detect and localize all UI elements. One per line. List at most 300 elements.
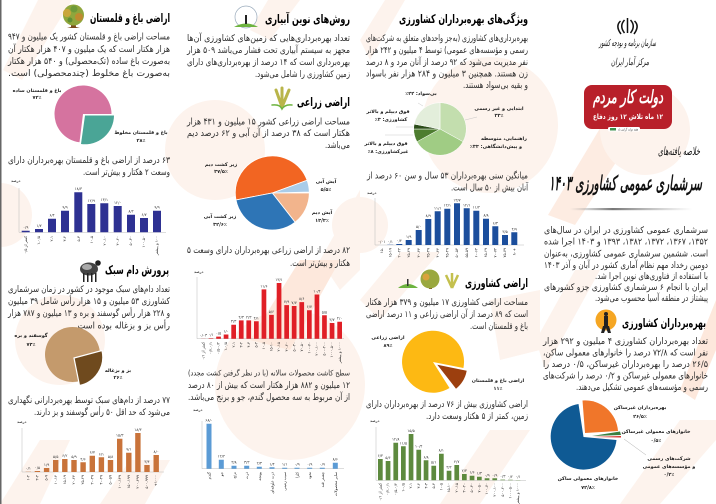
- bar chart: herd size: ۱۵-۱۹: [62, 475, 67, 485]
- pie chart: sheep and goats: ۷۴٪: [27, 342, 35, 348]
- bar chart: farmer age: ۶/۳: [493, 220, 498, 225]
- bar chart: farmer age: +۸۰: [512, 248, 516, 255]
- pie chart: farmer types: ۰/۵٪: [651, 438, 661, 444]
- bar chart: arable land size: ۱۱/۶: [260, 283, 268, 288]
- bar chart: land size: ۱۰/۴: [415, 444, 422, 449]
- pie chart: arable land: آیش دیم: [312, 209, 332, 216]
- bar chart: orchard land size: ۱۲/۹: [88, 198, 95, 203]
- pie chart: education: راهنمایی، متوسطه: [481, 136, 527, 142]
- bar chart: farmer age: ۰/۴: [397, 238, 402, 243]
- bar chart: land size: ۴/۷: [454, 459, 459, 464]
- bar chart: arable land size: ۶/۷: [307, 304, 312, 309]
- pie chart: sheep and goats: بز و بزغاله: [105, 368, 131, 374]
- pie chart: education: ابتدایی و غیر رسمی: [474, 106, 524, 112]
- text: farmer characteristics description: و بقیه بی‌سواد هستند.: [463, 81, 528, 91]
- bar chart: orchard land size: ۱۰۰-۵۰: [141, 236, 146, 248]
- bar chart: herd size: ۰/۵: [35, 465, 40, 470]
- text: irrigation description: تعداد بهره‌برداری‌هایی که زمین‌های کشاورزی آن‌ها: [187, 32, 350, 44]
- bar chart: arable land size: ۱۳/۱: [275, 277, 283, 282]
- bar chart: annual crops: ۳/۳: [244, 460, 249, 465]
- bar chart: farmer age: ۲۵-۲۹: [406, 248, 411, 258]
- bar chart: land size: ۲-۱: [408, 483, 413, 488]
- text: arable size: هکتار و بیش‌تر است.: [290, 259, 350, 269]
- bar chart: annual crops: کلزا: [294, 472, 300, 478]
- text: introduction: [544, 226, 708, 304]
- bar chart: orchard land size: ۱۰-۵: [89, 236, 94, 244]
- bar chart: orchard land size: ۱-۰/۵: [36, 236, 41, 245]
- bar chart: arable land size: ۳۰-۲۰: [284, 342, 289, 352]
- text: land size: زمین، کمتر از ۵ هکتار وسعت دارد.: [426, 412, 528, 422]
- bar chart: land size: ۱۲/۸: [392, 437, 399, 442]
- text: orchard lands description: هزار هکتار است که یک میلیون و ۴۰۷ هزار هکتار آن: [8, 43, 170, 55]
- bar chart: arable land size: ۲۰۰-۱۰۰: [314, 342, 319, 356]
- bar chart: arable land size: ۴/۳: [246, 314, 251, 319]
- bar chart: arable land size: کمتر از ۰/۱: [200, 342, 206, 360]
- pie chart: sheep and goats: [14, 327, 131, 386]
- icon: wheat: [272, 88, 292, 109]
- text: livestock description: کشاورزی ۵۳ میلیون و ۱۵ هزار رأس شامل ۳۹ میلیون: [8, 295, 171, 307]
- pie chart: education: فوق دیپلم و بالاتر: [365, 109, 410, 115]
- bar chart: annual crops: ۱/۱: [282, 462, 287, 467]
- bar chart: arable land size: درصد: [194, 270, 204, 274]
- bar chart: land size: ۰/۲-۰/۱: [385, 483, 390, 495]
- pie chart: farmer types: خانوارهای معمولی غیرساکن: [621, 429, 691, 435]
- text: arable size: ۸۲ درصد از اراضی زراعی بهره‌برداران دارای وسعت ۵: [187, 246, 350, 256]
- slogan badge: ۱۲ ماه تلاش ۱۲ روز دفاع: [593, 113, 664, 121]
- heading: farmer characteristics: ویژگی‌های بهره‌برداران کشاورزی: [399, 12, 528, 27]
- text: land size: [366, 400, 528, 422]
- pie chart: orchard types: [13, 86, 168, 144]
- bar chart: land size: ۰/۵-۰/۲: [393, 483, 398, 495]
- text: irrigation description: [186, 32, 350, 80]
- bar chart: orchard land size: ۶/۷: [141, 212, 147, 217]
- organisation name: مرکز آمار ایران: [611, 56, 649, 68]
- bar chart: land size: [370, 419, 526, 504]
- bar chart: farmer age: ۰/۰۱: [378, 239, 385, 244]
- pie chart: farmer types: ۷۲/۸٪: [581, 485, 595, 491]
- bar chart: land size: ۲/۳: [462, 468, 467, 473]
- pie chart: farmer types: [551, 400, 695, 491]
- bar chart: annual crops: ۳/۸: [231, 460, 237, 465]
- bar chart: arable land size: ۰/۵-۰/۲: [216, 342, 220, 354]
- text: farmer age: آنان بیش از ۵۰ سال است.: [451, 182, 528, 194]
- text: orchard size: وسعت ۲ هکتار و بیش‌تر است.: [83, 168, 170, 178]
- bar chart: land size: ۳۰-۲۰: [462, 483, 466, 493]
- bar chart: arable land size: [194, 270, 344, 364]
- bar chart: land size: ۱۰-۵: [438, 483, 444, 490]
- bar chart: orchard land size: ۱/۷: [36, 223, 42, 228]
- bar chart: arable land size: ۵۰-۳۰: [292, 342, 296, 352]
- bar chart: farmer age: ۴/۹: [512, 226, 517, 231]
- bar chart: farmer age: ۴۰-۴۴: [435, 248, 440, 258]
- bar chart: orchard land size: ۰/۹: [23, 224, 28, 230]
- bar chart: herd size: ۲۰-۲۴: [71, 475, 76, 485]
- bar chart: herd size: ۹/۱: [126, 447, 131, 452]
- bar chart: orchard land size: ۱۰۰ و بیشتر: [154, 236, 159, 256]
- bar chart: arable land size: ۰/۵: [216, 330, 221, 336]
- text: farmer age: میانگین سنی بهره‌برداران ۵۳ سال و سن ۶۰ درصد از: [366, 170, 528, 182]
- bar chart: annual crops: ۰/۹: [307, 462, 312, 467]
- pie chart: farmer types: و مؤسسه‌های عمومی: [643, 464, 695, 470]
- bar chart: land size: ۱۱/۵: [400, 440, 407, 445]
- pie chart: education: و پیش‌دانشگاهی: ۳۴٪: [470, 143, 522, 150]
- bar chart: land size: ۶/۳: [378, 453, 383, 458]
- bar chart: arable land size: ۴/۰: [337, 316, 342, 321]
- text: farmer characteristics description: زن هستند. همچنین ۳ میلیون و ۲۸۴ هزار نفر باسواد: [366, 70, 528, 80]
- bar chart: arable land size: ۱-۰/۵: [223, 342, 228, 351]
- slogan badge: [584, 85, 672, 132]
- text: orchard size: ۶۳ درصد از اراضی باغ و قلمستان بهره‌برداران دارای: [8, 156, 170, 166]
- bar chart: orchard land size: ۹/۹: [154, 204, 160, 210]
- text: orchard lands description: به‌صورت باغ مخلوط (چندمحصولی) است.: [8, 69, 170, 79]
- pie chart: arable land: ۴۷/۵٪: [214, 169, 228, 175]
- bar chart: land size: ۲۰۰-۱۰۰: [492, 483, 497, 497]
- pie chart: arable land: [204, 156, 337, 230]
- heading: orchard lands: اراضی باغ و قلمستان: [90, 11, 170, 26]
- text: arable description: مساحت اراضی زراعی کشور ۱۵ میلیون و ۴۳۱ هزار: [186, 118, 350, 128]
- icon: sheep: [80, 260, 101, 282]
- bar chart: herd size: ۳۰-۳۹: [90, 475, 94, 485]
- bar chart: orchard land size: درصد: [11, 179, 21, 183]
- bar chart: orchard land size: ۹/۹: [62, 204, 68, 210]
- bar chart: annual crops: یونجه: [257, 472, 262, 481]
- pie chart: farmer types: ۲۶/۵٪: [633, 414, 647, 420]
- bar chart: annual crops: جو: [219, 471, 224, 477]
- text: livestock description: [7, 285, 171, 332]
- bar chart: arable land size: ۰/۲-۰/۱: [208, 342, 213, 354]
- pie chart: farmer types: ۰/۲٪: [664, 472, 674, 478]
- pie chart: arable land: ۱۴/۴٪: [315, 218, 329, 224]
- bar chart: arable land size: ۵/۶: [269, 309, 274, 314]
- bar chart: herd size: ۰/۱: [26, 466, 31, 471]
- bar chart: farmer age: ۳۵-۳۹: [426, 248, 430, 258]
- bar chart: land size: ۰/۳: [500, 474, 505, 479]
- pie chart: sheep and goats: گوسفند و بره: [14, 332, 48, 339]
- bar chart: farmer age: ۴۵-۴۹: [444, 248, 450, 258]
- bar chart: land size: ۱۵/۵: [407, 428, 415, 433]
- text: farmer characteristics description: [365, 34, 528, 91]
- pie chart: education: فوق دیپلم و بالاتر: [363, 141, 408, 147]
- pie chart: agricultural lands: اراضی باغ و قلمستان: [472, 378, 525, 384]
- bar chart: annual crops: ۱۲/۴: [218, 454, 225, 459]
- emblem: [618, 18, 637, 34]
- bar chart: annual crops: سایر محصولات: [333, 472, 338, 496]
- text: farmer characteristics description: بهره‌برداری‌های کشاورزی (به‌جز واحدهای متعلق به شرکت‌های: [366, 34, 528, 44]
- bar chart: land size: ۵۰-۳۰: [469, 483, 474, 493]
- text: introduction: ۱۳۵۲، ۱۳۶۷، ۱۳۷۲، ۱۳۸۲، ۱۳۹۳ و ۱۴۰۳ اجرا شده: [544, 238, 708, 248]
- text: annual crops: سطح کاشت محصولات سالانه (با در نظر گرفتن کشت مجدد): [188, 368, 350, 378]
- bar chart: arable land size: ۰/۱: [208, 332, 214, 337]
- pie chart: arable land: زیر کشت آبی: [204, 213, 236, 220]
- bar chart: land size: ۰/۱: [515, 474, 521, 479]
- bar chart: farmer age: ۱۵-۱۹: [388, 248, 392, 258]
- text: irrigation description: بهره‌برداری است که ۱۴ درصد از بهره‌برداری‌های دارای: [187, 58, 350, 68]
- bar chart: land size: ۵-۴: [431, 483, 436, 488]
- bar chart: herd size: ۵/۵: [53, 454, 58, 459]
- bar chart: orchard land size: ۵-۳: [76, 236, 81, 241]
- bar chart: annual crops: ۱/۴: [269, 461, 275, 466]
- bar chart: land size: ۵/۱: [431, 460, 436, 465]
- bar chart: annual crops: ذرت علوفه‌ای: [270, 472, 274, 494]
- bar chart: annual crops: ۰/۹: [320, 462, 325, 467]
- bar chart: arable land size: ۱۰۰-۷۰: [306, 342, 312, 354]
- bar chart: orchard land size: ۶/۴: [49, 212, 55, 218]
- bar chart: herd size: ۳/۴: [144, 459, 150, 464]
- bar chart: orchard land size: ۸/۲: [128, 208, 134, 214]
- bar chart: annual crops: ۶۸/۰: [205, 418, 213, 423]
- bar chart: farmer age: ۳/۵: [502, 229, 508, 234]
- heading: modern irrigation: روش‌های نوین آبیاری: [265, 11, 350, 27]
- bar chart: orchard land size: کمتر از ۰/۵: [23, 236, 28, 254]
- bar chart: herd size: ۵-۹: [44, 475, 48, 480]
- icon: tree: [63, 4, 84, 28]
- text: farmers description: نفر است که ۷۲/۸ درصد را خانوارهای معمولی ساکن،: [543, 348, 708, 358]
- text: farmer characteristics description: نفر مدیریت می‌شود که ۹۲ درصد از آنان مرد و ۸ درصد: [366, 56, 528, 68]
- heading: agricultural lands: اراضی کشاورزی: [465, 276, 528, 291]
- text: herd size: [8, 394, 170, 418]
- pie chart: farmer types: بهره‌برداران غیرساکن: [614, 405, 667, 411]
- bar chart: farmer age: ۱/۹: [406, 234, 411, 239]
- pie chart: agricultural lands: اراضی زراعی: [371, 335, 405, 341]
- bar chart: land size: ۲۰-۱۵: [454, 483, 459, 493]
- text: livestock description: رأس بز و بزغاله بوده است.: [75, 320, 170, 332]
- text: herd size: ۷۷ درصد از دام‌های سبک توسط بهره‌بردارانی نگهداری: [8, 394, 170, 406]
- bar chart: herd size: ۱۰۰-۱۴۹: [117, 475, 122, 489]
- bar chart: farmer age: ۵۵-۵۹: [464, 248, 469, 258]
- bar chart: farmer age: ۵/۰: [416, 224, 421, 229]
- bar chart: orchard land size: ۲۰-۱۰: [102, 236, 107, 246]
- pie chart: orchard types: ۲۸٪: [137, 138, 145, 144]
- text: land size: اراضی کشاورزی بیش از ۷۶ درصد از بهره‌برداران دارای: [366, 400, 528, 410]
- bar chart: arable land size: ۴/۱: [254, 315, 259, 320]
- pie chart: education: [363, 91, 527, 155]
- bar chart: herd size: ۶/۱: [99, 451, 104, 456]
- bar chart: farmer age: ۱۲/۱: [463, 202, 470, 207]
- text: arable description: هکتار است که ۳۸ درصد از آن آبی و ۶۲ درصد دیم: [187, 127, 350, 139]
- bar chart: herd size: ۴۰-۴۹: [98, 475, 104, 485]
- bar chart: arable land size: ۰/۰۳: [200, 332, 207, 338]
- bar chart: herd size: ۱-۲: [26, 475, 30, 480]
- bar chart: land size: ۱-۰/۵: [400, 483, 406, 492]
- pie chart: farmer types: شرکت‌های رسمی: [647, 456, 691, 462]
- text: farmers description: [542, 337, 708, 393]
- text: farmers description: تعداد بهره‌برداران کشاورزی ۴ میلیون و ۲۹۲ هزار: [542, 337, 708, 347]
- icon: irrigation: [234, 6, 258, 28]
- bar chart: herd size: ۶/۷: [90, 450, 95, 455]
- bar chart: annual crops: گندم: [206, 472, 212, 479]
- bar chart: arable land size: ۵/۵: [322, 309, 327, 314]
- bar chart: herd size: ۱۰-۱۴: [53, 475, 58, 485]
- bar chart: herd size: ۱۰۰۰+: [153, 475, 158, 486]
- heading: livestock: پرورش دام سبک: [105, 263, 169, 278]
- text: farmer age: [366, 170, 528, 194]
- bar chart: land size: ۰/۹: [484, 472, 490, 477]
- bar chart: arable land size: ۱۰۰۰-۵۰۰: [329, 342, 334, 358]
- bar chart: land size: ۸/۱: [439, 448, 444, 453]
- bar chart: orchard land size: ۱۸/۳: [75, 186, 82, 191]
- bar chart: annual crops: ۲/۳: [257, 461, 262, 466]
- bar chart: herd size: ۶/۲: [62, 453, 67, 458]
- bar chart: land size: ۷۰-۵۰: [476, 483, 482, 493]
- bar chart: orchard land size: ۳۰-۲۰: [115, 236, 120, 246]
- pie chart: arable land: زیر کشت دیم: [205, 162, 237, 168]
- bar chart: annual crops: ۸/۶: [333, 457, 338, 462]
- bar chart: herd size: ۵۰-۵۹: [108, 475, 112, 485]
- bar chart: herd size: ۳-۴: [34, 475, 40, 480]
- bar chart: farmer age: ۸/۹: [426, 213, 431, 218]
- bar chart: farmer age: ۷۰-۷۴: [492, 248, 498, 258]
- text: livestock description: و ۲۲۸ هزار رأس گوسفند و بره و ۱۳ میلیون و ۷۸۷ هزار: [7, 307, 170, 319]
- bar chart: land size: ۱۰۰-۷۰: [484, 483, 489, 495]
- bar chart: herd size: ۸/۰: [154, 449, 159, 454]
- bar chart: farmer age: ۷۵-۷۹: [502, 248, 507, 258]
- text: irrigation description: زمین کشاورزی را شامل می‌شود.: [255, 70, 350, 80]
- bar chart: farmer age: -۱۵: [379, 247, 384, 253]
- bar chart: land size: ۱۰۰۰-۵۰۰: [508, 483, 512, 499]
- icon: farmer and sun: [596, 310, 616, 333]
- slogan badge: هفته دولت گرامی باد: [618, 128, 638, 132]
- bar chart: land size: ۴-۳: [424, 483, 428, 488]
- text: agricultural lands description: باغ و قلمستان است.: [470, 322, 528, 332]
- bar chart: annual crops: [193, 408, 344, 496]
- bar chart: arable land size: ۲۰-۱۵: [276, 342, 281, 352]
- text: livestock description: تعداد دام‌های سبک موجود در کشور در زمان سرشماری: [8, 285, 170, 295]
- bar chart: arable land size: ۴/۳: [239, 314, 244, 319]
- bar chart: orchard land size: ۱۲/۰: [114, 200, 121, 205]
- text: orchard lands description: [7, 32, 170, 79]
- text: arable description: می‌باشد.: [325, 141, 350, 151]
- bar chart: farmer age: ۶۰-۶۴: [474, 248, 478, 258]
- text: annual crops: از آن مربوط به سه محصول گندم، جو و برنج می‌باشد.: [188, 391, 350, 403]
- pie chart: orchard types: باغ و قلمستان مخلوط: [114, 130, 168, 136]
- bar chart: arable land size: ۱۰-۵: [261, 342, 266, 350]
- bar chart: herd size: ۵/۸: [108, 454, 113, 459]
- bar chart: land size: ۱۵-۱۰: [446, 483, 451, 493]
- bar chart: farmer age: ۳۰-۳۴: [416, 248, 421, 258]
- bar chart: arable land size: ۷/۹: [284, 299, 289, 304]
- text: farmer characteristics description: رسمی و مؤسسه‌های عمومی) توسط ۴ میلیون و ۲۴۲ هزار: [365, 46, 528, 56]
- bar chart: farmer age: ۸/۸: [483, 213, 489, 218]
- pie chart: orchard types: ۷۲٪: [33, 95, 41, 101]
- slogan badge: دولت کار مردم: [592, 87, 664, 108]
- bar chart: arable land size: ۷۰-۵۰: [299, 342, 304, 352]
- bar chart: farmer age: ۱۲/۱: [444, 203, 451, 208]
- bar chart: orchard land size: ۱۳/۱: [101, 197, 108, 202]
- bar chart: annual crops: ذرت: [244, 472, 249, 479]
- bar chart: land size: ۱۰۰۰ و بیشتر: [515, 483, 520, 504]
- bar chart: farmer age: ۰/۱: [388, 239, 393, 244]
- bar chart: herd size: [17, 420, 164, 489]
- bar chart: herd size: ۵۰۰-۹۹۹: [144, 475, 149, 489]
- bar chart: arable land size: ۳/۷: [329, 317, 335, 322]
- text: سازمان برنامه و بودجه کشور: [599, 38, 657, 49]
- bar chart: land size: ۶/۸: [423, 454, 429, 459]
- bar chart: annual crops: سیب زمینی: [282, 472, 287, 491]
- bar chart: annual crops: برنج: [232, 472, 236, 479]
- text: agricultural lands description: مساحت اراضی کشاورزی ۱۷ میلیون و ۳۷۹ هزار هکتار: [365, 298, 528, 308]
- pie chart: arable land: ۳۲/۶٪: [213, 222, 227, 228]
- text: orchard size: [8, 156, 170, 178]
- bar chart: orchard land size: ۵۰-۳۰: [128, 236, 133, 246]
- bar chart: arable land size: ۱۵-۱۰: [268, 342, 274, 352]
- bar chart: herd size: ۵/۹: [71, 454, 77, 459]
- text: annual crops: ۱۲ میلیون و ۸۸۲ هزار هکتار است که بیش از ۸۰ درصد: [188, 381, 350, 391]
- bar chart: arable land size: ۱۰/۴: [313, 288, 321, 294]
- pie chart: arable land: آیش آبی: [316, 178, 337, 185]
- bar chart: herd size: ۱/۹: [44, 462, 49, 467]
- bar chart: farmer age: ۵۰-۵۴: [454, 248, 459, 258]
- bar chart: orchard land size: ۲-۱: [49, 236, 54, 241]
- bar chart: arable land size: ۱/۰: [223, 328, 229, 334]
- bar chart: herd size: ۴/۶: [80, 456, 86, 461]
- bar chart: farmer age: ۱۱/۴: [473, 205, 480, 210]
- bar chart: farmer age: ۱۳/۷: [453, 197, 461, 202]
- bar chart: orchard land size: [11, 179, 166, 256]
- bar chart: land size: کمتر از ۰/۱: [378, 483, 382, 501]
- bar chart: annual crops: نخود: [307, 472, 312, 479]
- pie chart: education: غیرکشاورزی: ۸٪: [368, 149, 408, 155]
- bar chart: land size: ۰/۲: [508, 474, 513, 479]
- bar chart: herd size: ۲۵-۲۹: [80, 475, 85, 485]
- bar chart: arable land size: ۷/۷: [291, 300, 297, 305]
- bar chart: herd size: ۱۸/۳: [134, 427, 142, 432]
- text: orchard lands description: مساحت اراضی باغ و قلمستان کشور یک میلیون و ۹۴۷: [8, 32, 170, 42]
- bar chart: land size: ۳/۲: [446, 465, 452, 470]
- bar chart: farmer age: ۲۰-۲۴: [396, 248, 402, 258]
- bar chart: herd size: ۱۵/۳: [116, 433, 123, 438]
- bar chart: arable land size: ۳-۲: [238, 342, 244, 347]
- text: agricultural lands description: [365, 298, 528, 332]
- bar chart: land size: درصد: [370, 419, 380, 423]
- bar chart: arable land size: ۲-۱: [231, 342, 236, 347]
- bar chart: land size: ۳-۲: [416, 483, 421, 488]
- bar chart: land size: ۱/۳: [477, 471, 482, 476]
- text: annual crops: [188, 368, 350, 403]
- text: introduction: ایران با انجام ۶ سرشماری کشاورزی جزو کشورهای: [544, 283, 708, 293]
- pie chart: farmer types: خانوارهای معمولی ساکن: [558, 476, 619, 482]
- bar chart: land size: ۱/۶: [469, 470, 475, 475]
- icons: irrigation, tree and wheat: [398, 270, 458, 289]
- bar chart: arable land size: ۵-۴: [254, 342, 258, 347]
- bar chart: orchard land size: ۳-۲: [62, 236, 67, 241]
- bar chart: land size: ۰/۹: [492, 472, 497, 477]
- pie chart: agricultural lands: ۱۱٪: [494, 386, 502, 392]
- text: arable description: [186, 118, 350, 151]
- pie chart: sheep and goats: ۲۶٪: [114, 375, 122, 381]
- bar chart: land size: ۵۰۰-۲۰۰: [500, 483, 505, 497]
- bar chart: arable land size: ۳/۳: [231, 319, 236, 324]
- pie chart: agricultural lands: ۸۹٪: [384, 343, 392, 349]
- bar chart: land size: ۵/۶: [385, 455, 391, 460]
- bar chart: annual crops: چغندر قند: [320, 471, 325, 487]
- text: farmers description: ۲۶/۵ درصد را بهره‌برداران غیرساکن، ۰/۵ درصد را: [543, 360, 708, 370]
- pie chart: orchard types: باغ و قلمستان ساده: [13, 88, 61, 94]
- bar chart: arable land size: ۸/۶: [299, 296, 304, 301]
- bar chart: arable land size: ۱۰۰۰ و بیشتر: [337, 342, 342, 364]
- bar chart: herd size: درصد: [17, 420, 27, 424]
- bar chart: herd size: ۲۰۰-۴۹۹: [135, 475, 140, 489]
- bar chart: arable land size: ۵۰۰-۲۰۰: [322, 342, 326, 356]
- pie chart: education: بی‌سواد: ۲۲٪: [405, 91, 437, 97]
- pie chart: agricultural lands: [371, 331, 525, 393]
- bar chart: farmer age: ۶۵-۶۹: [483, 248, 488, 258]
- bar chart: farmer age: درصد: [367, 191, 377, 195]
- text: irrigation description: مجهز به سیستم آبیاری تحت فشار می‌باشد ۵۰۹ هزار: [186, 44, 350, 56]
- text: herd size: می‌شود که حد اقل ۵۰ رأس گوسفند و بز دارند.: [34, 406, 170, 418]
- heading: arable lands: اراضی زراعی: [297, 95, 350, 109]
- text: agricultural lands description: است که ۸۹ درصد از آن اراضی زراعی و ۱۱ درصد اراضی: [366, 308, 528, 320]
- bar chart: annual crops: درصد: [193, 408, 203, 412]
